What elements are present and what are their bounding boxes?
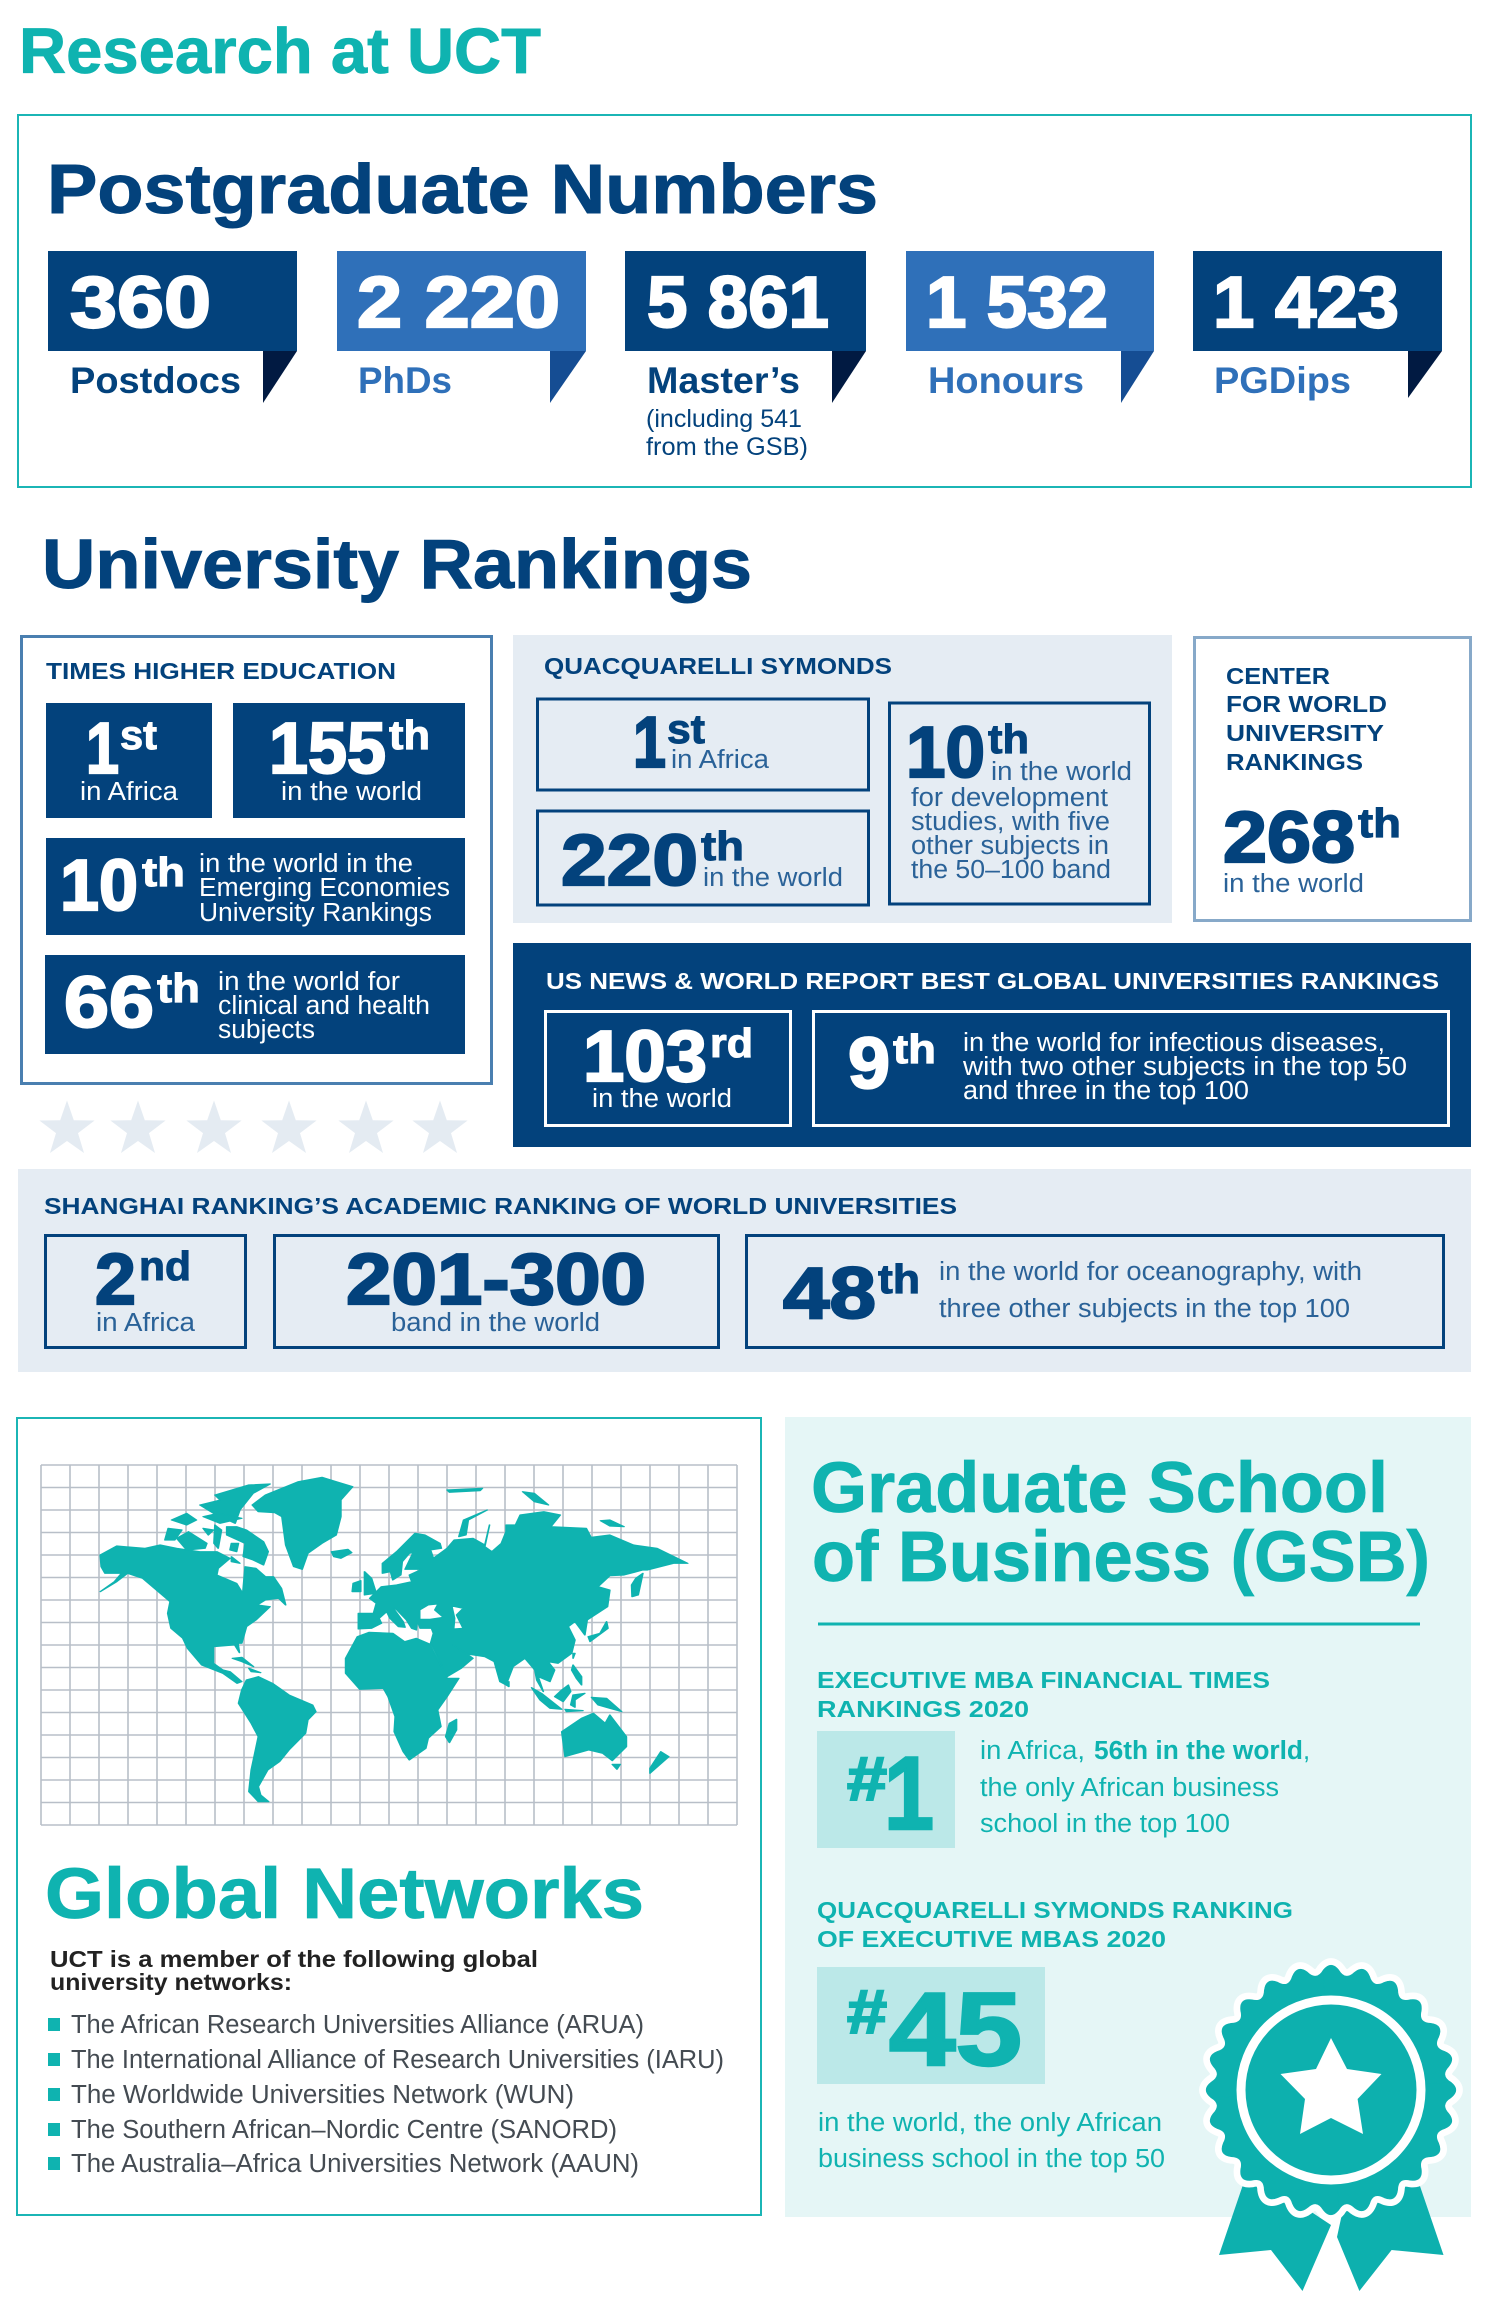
heading: university rankings: University Rankings	[42, 525, 752, 603]
heading: graduate school of business: Graduate School	[811, 1449, 1388, 1528]
rank: 2nd in Africa: 2	[95, 1240, 136, 1320]
rank: 10th emerging economies: University Rankings	[199, 899, 432, 927]
list: global networks: The International Alliance of Research Universities (IARU)	[71, 2046, 724, 2074]
panel: global networks	[17, 1418, 761, 2215]
rank: 9th infectious diseases: and three in the top 100	[963, 1077, 1249, 1105]
rank: 48th oceanography	[746, 1236, 1444, 1348]
rank: 48th oceanography: three other subjects in the top 100	[939, 1295, 1350, 1323]
rank: 2nd in Africa: nd	[139, 1243, 191, 1289]
block: executive MBA financial times: EXECUTIVE MBA FINANCIAL TIMES	[817, 1667, 1270, 1693]
stat: 360 postdocs: Postdocs	[70, 360, 241, 401]
heading: postgraduate numbers: Postgraduate Numbers	[47, 150, 878, 228]
rank: 1st in Africa	[46, 703, 212, 818]
rank: 10th emerging economies: Emerging Economies	[199, 874, 450, 902]
stat: 2 220 PhDs	[337, 251, 586, 403]
icon: award rosette	[1199, 1958, 1463, 2291]
stat: 5 861 masters	[625, 251, 866, 461]
rank: 66th clinical and health: 66	[64, 963, 154, 1043]
text: networks intro: UCT is a member of the following global	[50, 1946, 538, 1972]
rank: 155th in the world	[233, 703, 465, 818]
stat: 5 861 masters: (including 541	[646, 405, 802, 433]
title: Research at UCT	[19, 15, 541, 87]
rank: 1st in Africa: st	[667, 706, 705, 752]
rank: 10th development studies: other subjects in	[911, 832, 1109, 860]
stat: 1 532 honours: Honours	[928, 360, 1084, 401]
rank: 10th emerging economies: in the world in the	[199, 850, 413, 878]
rank: 1st in Africa: 1	[633, 703, 666, 783]
heading: graduate school of business: of Business (GSB)	[812, 1518, 1430, 1597]
rank: 268th in the world: th	[1358, 800, 1401, 846]
block: executive MBA financial times: 56th in the world	[1094, 1737, 1303, 1765]
rank: 155th in the world: in the world	[281, 778, 422, 806]
rank: 103rd in the world: in the world	[592, 1085, 732, 1113]
stat: 1 532 honours: 1 532	[926, 263, 1108, 343]
rank: 10th development studies: studies, with five	[911, 808, 1110, 836]
rank: 1st in Africa: st	[120, 712, 157, 758]
block: executive MBA financial times: 1	[884, 1736, 934, 1852]
rank: 9th infectious diseases	[814, 1012, 1448, 1126]
rank: 48th oceanography: th	[878, 1256, 920, 1302]
block: executive MBA financial times: ,	[1303, 1737, 1310, 1765]
stat: 1 423 PGDips	[1193, 251, 1442, 401]
rank: 155th in the world: 155	[269, 709, 386, 789]
block: QS executive MBAs: OF EXECUTIVE MBAS 2020	[817, 1926, 1166, 1952]
block: executive MBA financial times: school in the top 100	[980, 1810, 1230, 1838]
rank: 66th clinical and health: th	[157, 965, 200, 1011]
rank: 9th infectious diseases: 9	[848, 1024, 890, 1104]
stat: 5 861 masters: 5 861	[647, 263, 829, 343]
heading: us news: US NEWS & WORLD REPORT BEST GLOBAL UNIVERSITIES RANKINGS	[546, 968, 1439, 994]
block: QS executive MBAs: in the world, the only African	[818, 2109, 1162, 2137]
rank: 48th oceanography: 48	[783, 1254, 876, 1334]
rank: 1st in Africa: in Africa	[80, 778, 179, 806]
rank: 1st in Africa	[538, 699, 868, 790]
list: global networks: The Worldwide Universities Network (WUN)	[71, 2081, 574, 2109]
stat: 360 postdocs	[48, 251, 297, 403]
rank: 10th development studies: in the world	[991, 758, 1132, 786]
panel: shanghai ranking	[18, 1169, 1471, 1372]
rank: 10th development studies: for development	[911, 784, 1108, 812]
rank: 10th development studies	[890, 703, 1150, 904]
rank: 155th in the world: th	[389, 712, 430, 758]
rank: 66th clinical and health: clinical and health	[218, 992, 430, 1020]
rank: 268th in the world: in the world	[1223, 870, 1364, 898]
rank: 103rd in the world: rd	[710, 1020, 753, 1066]
stat: 2 220 PhDs: 2 220	[357, 263, 560, 343]
rank: 201-300 band in the world	[274, 1236, 718, 1348]
rank: 9th infectious diseases: th	[893, 1026, 936, 1072]
rank: 220th in the world: th	[701, 823, 744, 869]
stat: 1 423 PGDips: PGDips	[1214, 360, 1351, 401]
rank: 2nd in Africa	[46, 1236, 246, 1348]
rank: 220th in the world: 220	[561, 821, 698, 901]
heading: CWUR: FOR WORLD	[1226, 691, 1387, 717]
list: global networks: The African Research Universities Alliance (ARUA)	[71, 2011, 644, 2039]
stat: 1 532 honours	[906, 251, 1154, 403]
panel: center for world university rankings	[1194, 638, 1470, 920]
rank: 220th in the world	[538, 811, 868, 905]
block: QS executive MBAs: business school in the top 50	[818, 2145, 1165, 2173]
rank: 10th emerging economies	[46, 838, 465, 935]
heading: shanghai ranking: SHANGHAI RANKING’S ACADEMIC RANKING OF WORLD UNIVERSITIES	[44, 1193, 957, 1219]
world map with grid	[41, 1465, 737, 1825]
panel: postgraduate numbers	[18, 115, 1471, 487]
block: QS executive MBAs	[817, 1897, 1293, 2173]
rank: 1st in Africa: 1	[86, 709, 119, 789]
stat: 5 861 masters: from the GSB)	[646, 433, 808, 461]
panel: us news and world report	[513, 943, 1471, 1147]
rank: 220th in the world: in the world	[703, 864, 843, 892]
heading: CWUR: RANKINGS	[1226, 749, 1363, 775]
heading: CWUR: CENTER	[1226, 663, 1330, 689]
block: QS executive MBAs: #	[847, 1978, 887, 2047]
block: QS executive MBAs: QUACQUARELLI SYMONDS RANKING	[817, 1897, 1293, 1923]
heading: CWUR: UNIVERSITY	[1226, 720, 1384, 746]
rank: 10th development studies: th	[988, 716, 1029, 762]
rank: 201-300 band in the world: band in the world	[391, 1309, 600, 1337]
block: executive MBA financial times: #	[847, 1745, 887, 1814]
rank: 10th development studies: the 50–100 band	[911, 856, 1111, 884]
heading: quacquarelli symonds: QUACQUARELLI SYMONDS	[544, 653, 892, 679]
stat: 1 423 PGDips: 1 423	[1213, 263, 1399, 343]
rank: 268th in the world	[1223, 798, 1401, 898]
list: global networks	[48, 2011, 724, 2178]
heading: times higher education: TIMES HIGHER EDUCATION	[46, 658, 396, 684]
rank: 268th in the world: 268	[1223, 798, 1355, 878]
rank: 66th clinical and health	[45, 955, 465, 1054]
heading: global networks: Global Networks	[45, 1855, 644, 1934]
stat: 360 postdocs: 360	[70, 263, 211, 343]
stars row	[39, 1100, 468, 1153]
heading: graduate school of business	[811, 1449, 1430, 1597]
rank: 1st in Africa: in Africa	[671, 746, 770, 774]
list: global networks: The Southern African–Nordic Centre (SANORD)	[71, 2116, 617, 2144]
rank: 66th clinical and health: in the world for	[218, 968, 401, 996]
text: networks intro: university networks:	[50, 1969, 292, 1995]
rank: 10th emerging economies: th	[142, 849, 185, 895]
panel: graduate school of business	[785, 1417, 1471, 2217]
rank: 9th infectious diseases: in the world for infectious diseases,	[963, 1029, 1385, 1057]
heading: CWUR	[1226, 663, 1387, 775]
rank: 10th emerging economies: 10	[60, 846, 138, 926]
block: QS executive MBAs: 45	[889, 1972, 1022, 2088]
ribbon tails	[1219, 2170, 1444, 2291]
text: networks intro	[50, 1946, 538, 1995]
block: executive MBA financial times: the only African business	[980, 1774, 1279, 1802]
rank: 2nd in Africa: in Africa	[96, 1309, 196, 1337]
stat: 2 220 PhDs: PhDs	[358, 360, 452, 401]
rank: 10th development studies: 10	[906, 713, 985, 793]
panel: quacquarelli symonds	[513, 635, 1172, 923]
rank: 103rd in the world	[546, 1012, 790, 1126]
rank: 48th oceanography: in the world for oceanography, with	[939, 1258, 1362, 1286]
stat: 5 861 masters: Master’s	[647, 360, 800, 401]
list: global networks: The Australia–Africa Universities Network (AAUN)	[71, 2150, 639, 2178]
rank: 201-300 band in the world: 201-300	[346, 1240, 646, 1320]
rank: 66th clinical and health: subjects	[218, 1016, 315, 1044]
block: executive MBA financial times: in Africa,	[980, 1737, 1085, 1765]
panel: times higher education	[22, 636, 492, 1084]
rank: 9th infectious diseases: with two other subjects in the top 50	[962, 1053, 1407, 1081]
rank: 103rd in the world: 103	[583, 1017, 707, 1097]
block: executive MBA financial times: RANKINGS 2020	[817, 1696, 1029, 1722]
block: executive MBA financial times	[817, 1667, 1310, 1852]
